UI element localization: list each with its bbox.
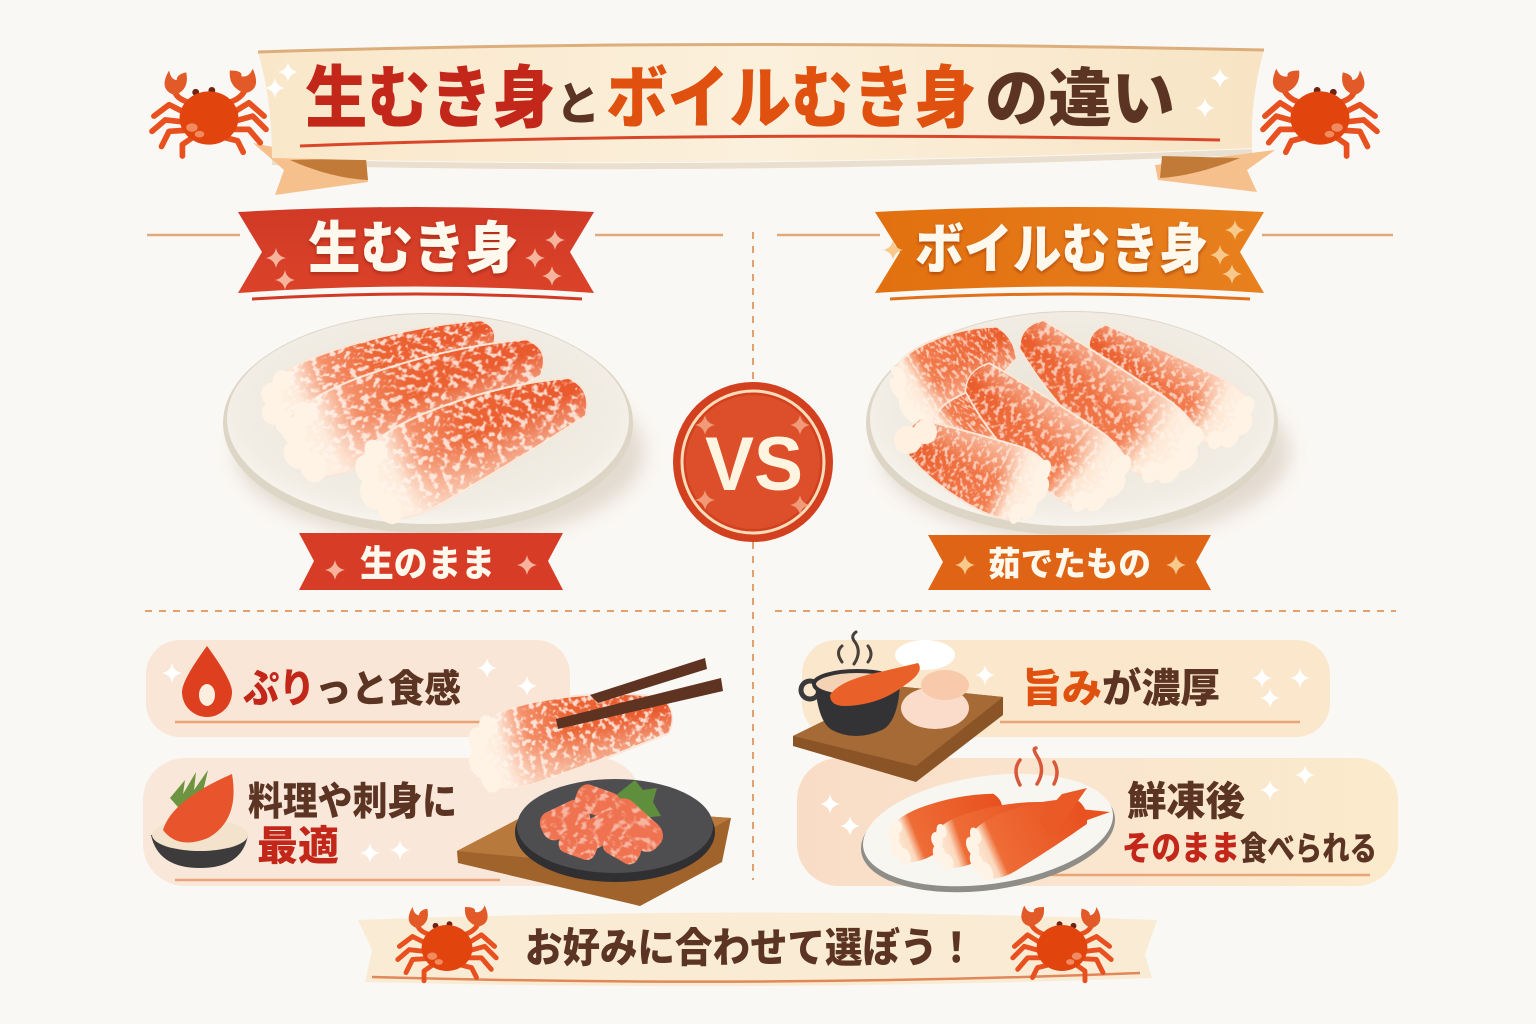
- text: flavor: が濃厚: [1102, 666, 1220, 711]
- text: flavor: [1022, 666, 1220, 711]
- text: ready to eat: [1122, 780, 1377, 868]
- illustration: pot of crab on wood board: [793, 632, 1003, 782]
- icon: crab: [398, 905, 496, 981]
- title banner: [253, 44, 1275, 195]
- panel: flavor: [802, 640, 1330, 737]
- icon: crab top right: [1263, 69, 1377, 156]
- text: ready to eat: 食べられる: [1240, 830, 1377, 867]
- text: use: 最適: [257, 823, 339, 869]
- icon: drop: [182, 646, 232, 717]
- heading text: ボイルむき身: [915, 220, 1208, 280]
- centre divider: dashed guides: [145, 232, 1396, 880]
- title text: と: [556, 78, 600, 130]
- title text: [305, 61, 1175, 137]
- label text: 茹でたもの: [988, 546, 1151, 584]
- text: flavor: 旨み: [1022, 667, 1102, 711]
- plate: raw crab meat: [223, 299, 645, 542]
- text: texture: ぷり: [243, 667, 315, 711]
- icon: crab: [1013, 905, 1111, 981]
- heading text: 生むき身: [308, 217, 518, 280]
- label text: 生のまま: [360, 543, 495, 584]
- icon: crab top left: [152, 69, 266, 156]
- VS text: VS: [705, 422, 803, 507]
- text: use: [248, 781, 457, 869]
- footer text: お好みに合わせて選ぼう！: [525, 925, 975, 971]
- label ribbon: boiled: [928, 535, 1211, 590]
- illustration: crab meat held by chopsticks: [459, 658, 723, 797]
- text: ready to eat: そのまま: [1122, 830, 1240, 868]
- panel: use: [143, 758, 641, 886]
- panel: texture: [146, 640, 570, 737]
- text: use: 料理や刺身に: [248, 781, 457, 824]
- VS badge: [673, 382, 833, 542]
- panel: ready to eat: [797, 758, 1398, 886]
- label ribbon: raw: [299, 533, 563, 590]
- panel heading: boiled: [875, 207, 1264, 299]
- text: ready to eat: 鮮凍後: [1127, 780, 1245, 824]
- plate: boiled crab meat: [866, 300, 1290, 542]
- icon: steam: [838, 632, 871, 664]
- footer ribbon: [358, 905, 1157, 986]
- title text: ボイルむき身: [606, 61, 976, 137]
- icon: dipping bowl: [151, 770, 248, 868]
- illustration: boiled crab on oval plate: [853, 748, 1123, 907]
- panel heading: raw: [238, 207, 594, 299]
- rule segments beside headers: [147, 234, 1393, 236]
- illustration: sashimi on wood board: [457, 779, 731, 906]
- icon: steam: [1016, 748, 1057, 785]
- title text: 生むき身: [305, 61, 555, 137]
- text: texture: [243, 667, 461, 711]
- title text: の違い: [985, 63, 1175, 135]
- text: texture: っと食感: [315, 669, 461, 711]
